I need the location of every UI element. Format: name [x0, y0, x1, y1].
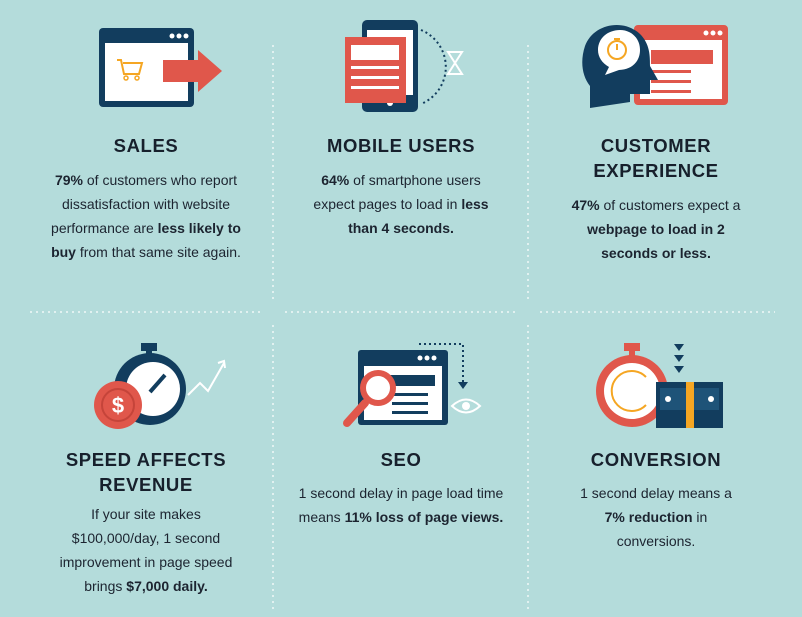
heading: customer: EXPERIENCE — [593, 160, 719, 181]
heading: speed — [66, 449, 226, 495]
text: sales: 79% of customers who report dissatisfaction with website performance are less likely to buy from that same site again. — [51, 172, 241, 260]
text: mobile: 64% of smartphone users expect pages to load in less than 4 seconds. — [313, 172, 489, 236]
icon: seo window magnifier — [347, 344, 480, 425]
text: speed: If your site makes — [91, 506, 201, 522]
icon: stopwatch with dollar: $ — [112, 393, 124, 418]
heading: customer — [593, 135, 719, 181]
icon: stopwatch with dollar — [94, 343, 225, 429]
panel: sales — [51, 135, 241, 260]
heading: speed: REVENUE — [99, 474, 193, 495]
panel: customer experience — [572, 135, 740, 261]
text: speed: $100,000/day, 1 second improvement in page speed brings $7,000 daily. — [60, 530, 232, 594]
heading: customer: CUSTOMER — [601, 135, 711, 156]
text: customer: 47% of customers expect a webpage to load in 2 seconds or less. — [572, 197, 740, 261]
heading: speed: SPEED AFFECTS — [66, 449, 226, 470]
panel: speed revenue — [60, 449, 232, 594]
icon: head with window — [582, 25, 728, 108]
panel: seo — [299, 449, 503, 525]
heading: mobile: MOBILE USERS — [327, 135, 475, 156]
panel: conversion — [580, 449, 732, 549]
icon: sales window with cart — [99, 28, 222, 107]
icon: conversion stopwatch money — [596, 343, 723, 428]
panel: mobile users — [313, 135, 489, 236]
heading: conversion: CONVERSION — [591, 449, 721, 470]
text: conversion: 1 second delay means a 7% reduction in conversions. — [580, 485, 732, 549]
text: seo: 1 second delay in page load time means 11% loss of page views. — [299, 485, 503, 525]
heading: sales: SALES — [114, 135, 178, 156]
heading: seo: SEO — [381, 449, 421, 470]
icon: mobile phone — [345, 20, 462, 112]
